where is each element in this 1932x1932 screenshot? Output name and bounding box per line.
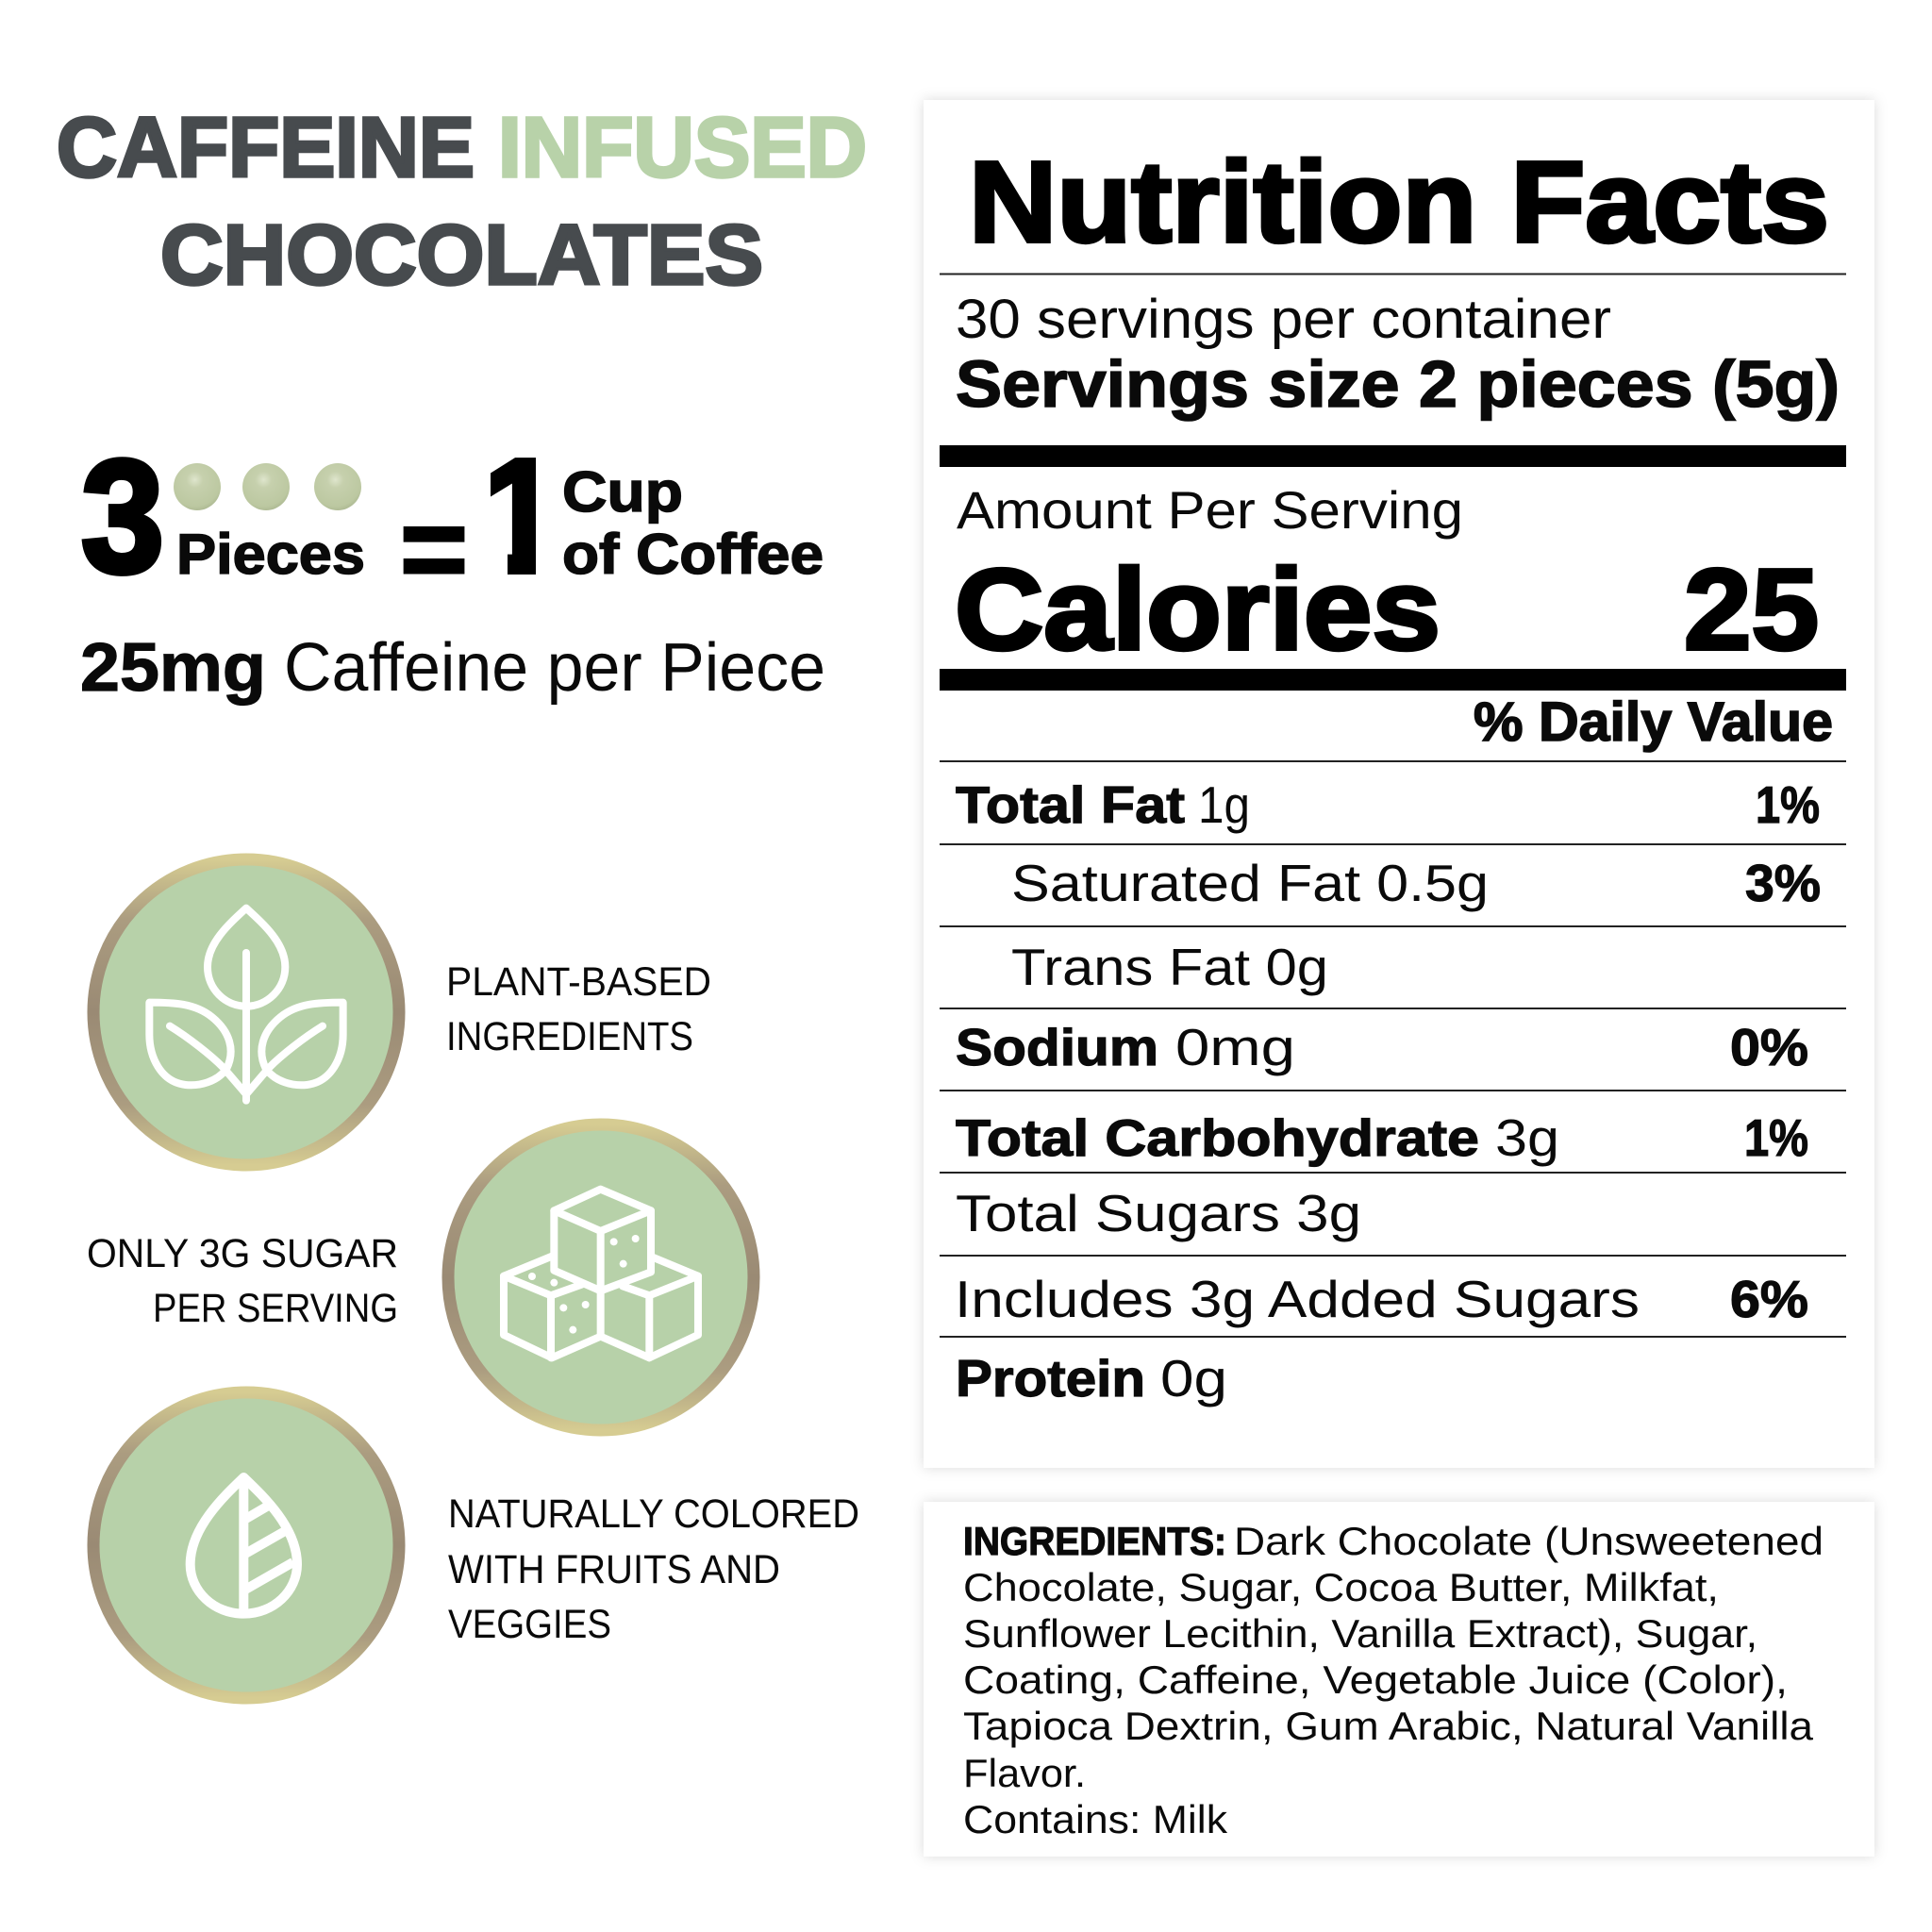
ingredients text: Dark Chocolate (Unsweetened [1234, 1519, 1824, 1563]
label: plant-based ingredients [446, 959, 711, 1059]
ingredients text: Tapioca Dextrin, Gum Arabic, Natural Vanilla [963, 1704, 1814, 1748]
badge: naturally colored [93, 1392, 399, 1698]
label: only 3g sugar [87, 1231, 398, 1331]
equation: 3 pieces equals 1 cup of coffee [81, 457, 823, 576]
row: protein [956, 1349, 1227, 1407]
icon: chocolate pieces [174, 463, 361, 510]
circle [448, 1124, 754, 1430]
heading: nutrition facts: Nutrition Facts [969, 138, 1829, 266]
row: total fat: 1g [1198, 775, 1250, 834]
badge: plant-based [93, 859, 399, 1165]
circle [93, 1392, 399, 1698]
card background [924, 100, 1874, 1468]
title word: chocolates: CHOCOLATES [160, 208, 763, 303]
percent daily value header: % Daily Value [1474, 691, 1833, 753]
25mg: 25mg [80, 630, 266, 706]
calories row [955, 545, 1819, 674]
row: protein: 0g [1160, 1349, 1227, 1407]
ingredients text: Chocolate, Sugar, Cocoa Butter, Milkfat, [963, 1565, 1719, 1609]
panel: ingredients [924, 1502, 1874, 1857]
label: plant-based ingredients: INGREDIENTS [446, 1014, 693, 1059]
row: total sugars: Total Sugars 3g [956, 1184, 1361, 1242]
ingredients text: INGREDIENTS: [963, 1519, 1226, 1563]
big number 1: 1 [475, 425, 570, 609]
row: total fat: Total Fat [956, 775, 1185, 834]
badge: sugar [448, 1124, 754, 1430]
label: naturally colored [448, 1491, 859, 1647]
caffeine per piece: Caffeine per Piece [284, 630, 825, 706]
servings per container: 30 servings per container [956, 289, 1611, 350]
caffeine per piece line [80, 630, 825, 706]
big number 3: 3 [81, 427, 164, 607]
calories row: 25 [1684, 545, 1819, 674]
cup label: Cup [562, 460, 683, 524]
row: total fat: 1% [1756, 775, 1820, 834]
label: naturally colored: VEGGIES [448, 1602, 611, 1647]
label: naturally colored: NATURALLY COLORED [448, 1491, 859, 1537]
ingredients text: Contains: Milk [963, 1797, 1228, 1841]
icon: sugar cubes [504, 1190, 698, 1357]
ingredients text: Coating, Caffeine, Vegetable Juice (Color), [963, 1657, 1788, 1702]
title [57, 101, 867, 303]
row: protein: Protein [956, 1349, 1145, 1407]
row: saturated fat [1011, 854, 1821, 912]
equals sign: = [400, 484, 468, 615]
row: total carbohydrate [956, 1108, 1808, 1167]
title word: infused: INFUSED [498, 101, 867, 195]
label: only 3g sugar: ONLY 3G SUGAR [87, 1231, 398, 1276]
pieces label: Pieces [176, 523, 365, 586]
icon: three leaves [149, 908, 343, 1101]
calories row: Calories [955, 545, 1441, 674]
row: total fat [956, 775, 1820, 834]
row: total carbohydrate: Total Carbohydrate [956, 1108, 1479, 1167]
row: added sugars: 6% [1730, 1270, 1808, 1328]
card background [924, 1502, 1874, 1857]
ingredients text: Sunflower Lecithin, Vanilla Extract), Sugar, [963, 1611, 1757, 1656]
ingredients text [963, 1519, 1824, 1841]
label: plant-based ingredients: PLANT-BASED [446, 959, 711, 1005]
row: added sugars: Includes 3g Added Sugars [955, 1270, 1640, 1328]
row: saturated fat: 3% [1745, 854, 1821, 912]
amount per serving: Amount Per Serving [957, 480, 1463, 540]
row: sodium: Sodium [956, 1018, 1158, 1076]
label: only 3g sugar: PER SERVING [153, 1286, 398, 1331]
row: trans fat: Trans Fat 0g [1011, 938, 1328, 996]
of coffee label: of Coffee [562, 523, 824, 586]
row: saturated fat: Saturated Fat 0.5g [1011, 854, 1489, 912]
row: sodium: 0mg [1175, 1018, 1295, 1076]
row: sodium: 0% [1730, 1018, 1808, 1076]
row: total carbohydrate: 3g [1495, 1108, 1559, 1167]
ingredients text: Flavor. [963, 1751, 1086, 1795]
row: sodium [956, 1018, 1808, 1076]
title word: caffeine: CAFFEINE [57, 101, 475, 195]
serving size: Servings size 2 pieces (5g) [956, 347, 1840, 421]
panel: nutrition facts [924, 100, 1874, 1468]
circle [93, 859, 399, 1165]
row: total carbohydrate: 1% [1744, 1108, 1808, 1167]
icon: leaf [191, 1477, 297, 1614]
label: naturally colored: WITH FRUITS AND [448, 1547, 780, 1592]
